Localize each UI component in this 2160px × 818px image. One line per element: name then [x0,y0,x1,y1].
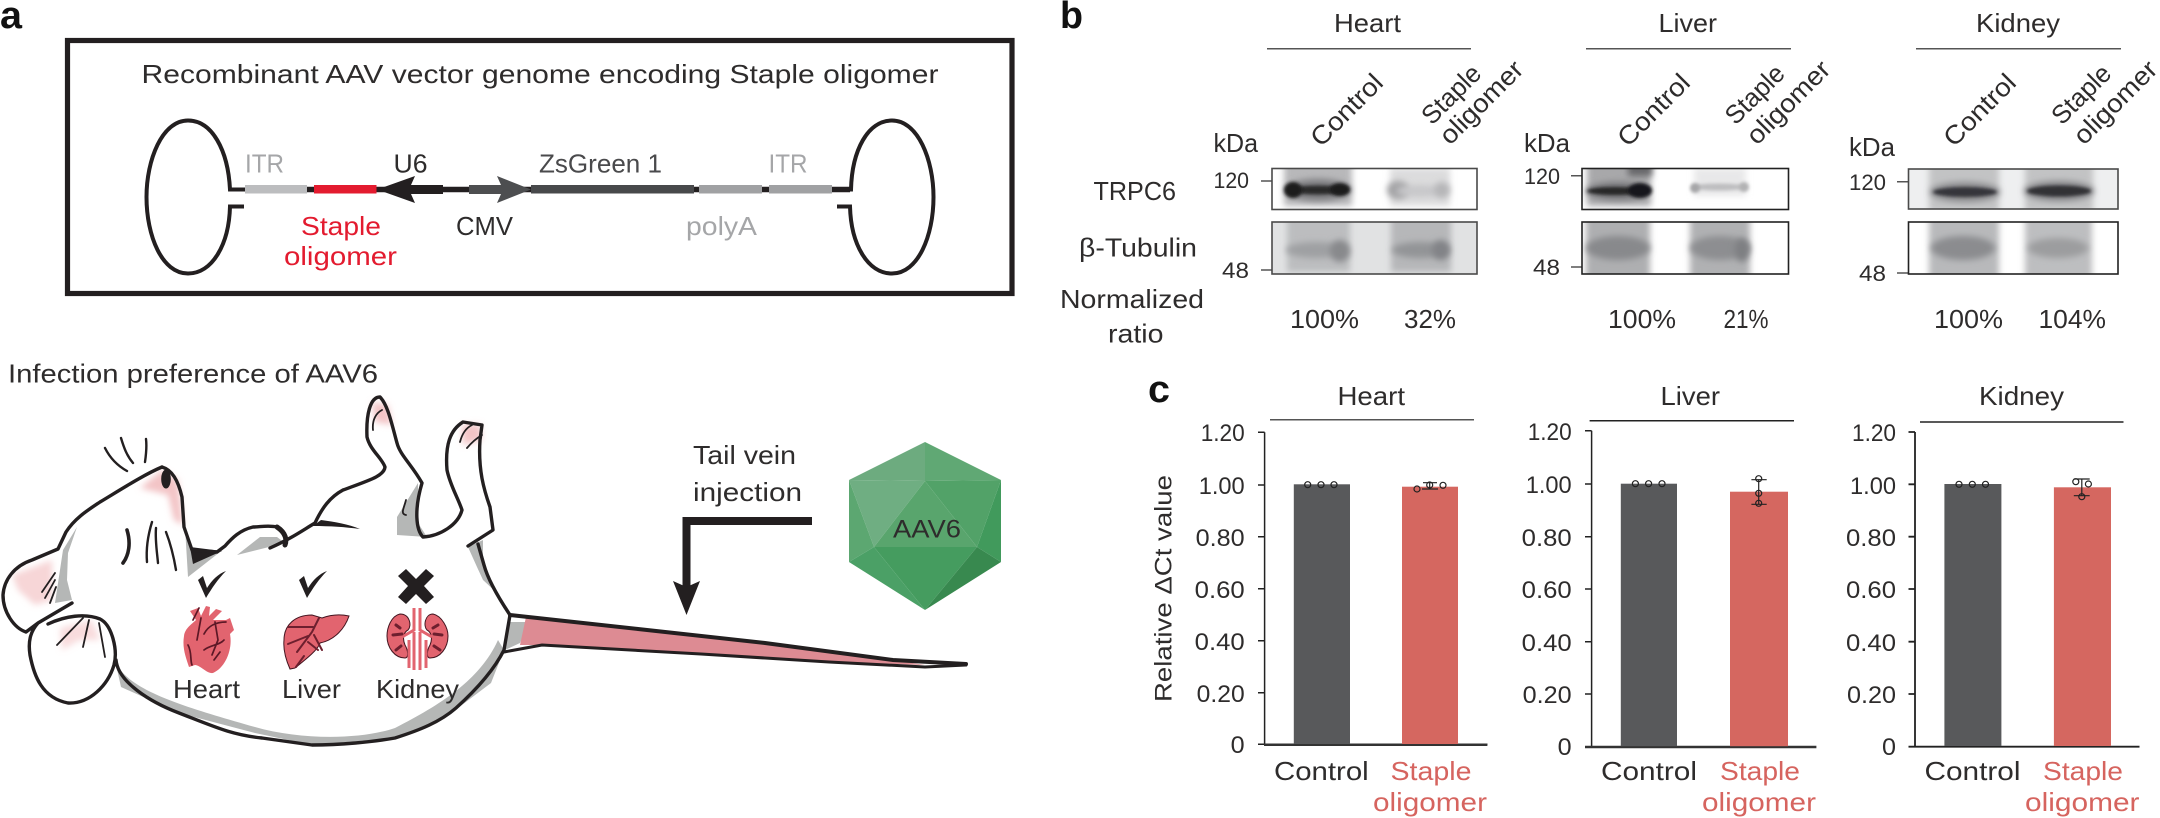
data points [1956,479,2091,500]
control bar [1621,484,1677,746]
check over liver [299,571,327,598]
paw shadow stroke [277,527,286,545]
row label beta-tubulin: β-Tubulin [1079,232,1197,262]
ratio values [1608,304,1768,334]
data points [1305,482,1446,492]
ratio values: 32% [1404,304,1456,334]
kDa label: kDa [1214,128,1259,158]
axes [1258,432,1487,745]
organ labels [173,674,459,704]
axes [1585,431,1592,747]
marker 120: 120 [1214,168,1249,193]
lane labels: Staple [1719,58,1791,130]
staple bar [1402,487,1458,744]
label CMV: CMV [456,211,514,241]
y tick labels: 0 [1882,734,1896,761]
y tick labels: 0.40 [1195,629,1245,656]
body outline [3,397,510,745]
y tick labels: 0.20 [1197,681,1245,708]
TRPC6 blot [1908,168,2119,210]
lane labels: Staple [2045,58,2117,130]
y tick labels: 0 [1558,734,1572,761]
row label normalized ratio: ratio [1108,318,1164,348]
y tick labels: 0.80 [1522,525,1572,552]
y tick labels: 1.20 [1852,420,1896,447]
axes [1908,432,2140,747]
tail vein injection label: Tail vein [693,440,796,470]
blot group: heart [1214,8,1529,334]
y tick labels: 0.80 [1196,525,1245,552]
y tick labels: 0.60 [1846,577,1896,604]
category labels: Staple [2043,756,2123,786]
row label TRPC6: TRPC6 [1094,176,1176,206]
control bar [1294,484,1350,744]
label ZsGreen 1: ZsGreen 1 [539,148,662,178]
y tick labels: 1.20 [1201,420,1245,447]
heart heading: Heart [1334,8,1402,38]
marker 48: 48 [1222,258,1249,283]
ratio values: 100% [1934,304,2003,334]
grey body shadows [55,483,529,745]
box frame [68,40,1012,294]
marker 48: 48 [1533,255,1560,280]
infection heading: Infection preference of AAV6 [8,358,378,388]
lane labels [1937,54,2160,152]
injection arrow [673,521,812,615]
bar chart: liver [1522,381,1816,817]
category labels [1601,756,1816,817]
blot group: liver [1524,8,1836,334]
ratio values: 104% [2038,304,2106,334]
y tick labels: 0.40 [1846,630,1896,657]
genome diagram [146,120,934,274]
U6 promoter arrow [377,176,443,203]
tail pink fill [520,617,925,665]
bar chart: heart [1195,381,1487,817]
capsid label: AAV6 [893,516,961,544]
y tick labels: 0.20 [1523,682,1572,709]
ZsGreen segment [531,185,694,194]
CMV promoter arrow [469,176,531,203]
label liver: Liver [282,674,341,704]
chart heading: Liver [1660,381,1720,411]
bar chart: kidney [1846,381,2140,817]
kDa label: kDa [1849,132,1896,162]
lane labels: Control [1304,67,1389,152]
y tick labels: 0.60 [1522,577,1572,604]
ratio values [1290,304,1456,334]
lane labels [1611,54,1836,152]
check over heart [198,571,226,598]
ratio values: 21% [1724,304,1768,334]
y tick labels: 1.20 [1528,419,1572,446]
lane labels: oligomer [1433,54,1529,150]
lane labels: Staple [1415,58,1487,130]
category labels: Control [1274,756,1369,786]
polyA segment [699,185,762,194]
chart heading: Kidney [1979,381,2064,411]
y tick labels: 1.00 [1526,472,1572,499]
staple oligomer segment [314,185,376,194]
label Staple oligomer: Staple [301,211,381,241]
y tick labels: 1.00 [1850,473,1896,500]
y tick labels: 0 [1231,732,1245,759]
marker 48: 48 [1859,261,1886,286]
staple bar [2054,487,2111,746]
y tick labels: 0.20 [1847,682,1896,709]
box title: Recombinant AAV vector genome encoding Staple oligomer [142,59,939,89]
icon: AAV6 capsid [849,442,1001,610]
ratio values [1934,304,2106,334]
marker 120: 120 [1524,164,1560,189]
right ITR loop [832,120,934,274]
nose [161,470,171,488]
left ITR loop [146,120,245,274]
y axis title: Relative ΔCt value [1150,475,1178,702]
hind leg wedge [313,520,360,529]
category labels [1924,756,2140,817]
category labels: oligomer [2025,787,2140,817]
lane labels: oligomer [1740,54,1836,150]
tail vein injection label: injection [693,477,802,507]
label kidney: Kidney [376,674,459,704]
right ITR segment [769,185,832,194]
y tick labels [1846,420,1896,761]
panel b: western blots [1060,0,2160,348]
ratio values: 100% [1608,304,1676,334]
category labels: Staple [1390,756,1472,786]
marker 120: 120 [1849,170,1886,195]
y tick labels: 0.60 [1195,577,1245,604]
category labels: Control [1924,756,2020,786]
label ITR left: ITR [245,148,284,178]
label ITR right: ITR [768,148,808,178]
label heart: Heart [173,674,241,704]
panel: vector genome box [68,40,1012,294]
tail outline [510,615,966,664]
backbone line [245,187,850,192]
tubulin blot [1272,216,1477,274]
pink shading on snout, ears and paws [12,402,482,650]
kDa label: kDa [1524,128,1571,158]
y tick labels: 1.00 [1199,473,1245,500]
staple bar [1730,492,1788,746]
label Staple oligomer: oligomer [284,241,397,271]
y tick labels [1195,420,1245,759]
TRPC6 blot [1272,162,1477,210]
mouse tail [504,615,966,667]
lane labels [1304,54,1529,152]
icon: heart [183,606,234,673]
left ITR segment [245,185,307,194]
lane labels: oligomer [2067,54,2160,150]
liver heading: Liver [1658,8,1717,38]
blot group: kidney [1849,8,2160,334]
icon: liver [284,615,349,669]
kidney heading: Kidney [1976,8,2060,38]
data points [1632,476,1767,506]
y tick labels [1522,419,1572,761]
category labels: Control [1601,756,1697,786]
TRPC6 blot [1581,168,1790,210]
tubulin blot [1908,221,2119,275]
category labels: Staple [1720,756,1800,786]
tubulin blot [1582,214,1788,280]
panel a: vector genome and mouse [0,0,1012,745]
cross over kidney [398,569,434,604]
y tick labels: 0.40 [1522,630,1572,657]
ear and toe lines [42,410,482,657]
label polyA: polyA [686,211,758,241]
eye [123,530,129,563]
chart heading: Heart [1338,381,1406,411]
lane labels: Control [1611,67,1696,152]
row label normalized ratio: Normalized [1060,284,1204,314]
category labels: oligomer [1373,787,1487,817]
cheek whiskers [147,522,176,570]
mouse illustration [3,397,966,745]
y tick labels: 0.80 [1846,525,1896,552]
panel c: bar charts [1148,369,2140,817]
icon: kidney [387,608,448,670]
whiskers near snout [105,438,146,471]
ratio values: 100% [1290,304,1359,334]
lane labels: Control [1937,67,2022,152]
panel letter c: c [1148,369,1170,411]
label U6: U6 [394,148,428,178]
control bar [1944,484,2001,746]
category labels: oligomer [1702,787,1816,817]
neck wedge [190,547,222,564]
category labels [1274,756,1487,817]
